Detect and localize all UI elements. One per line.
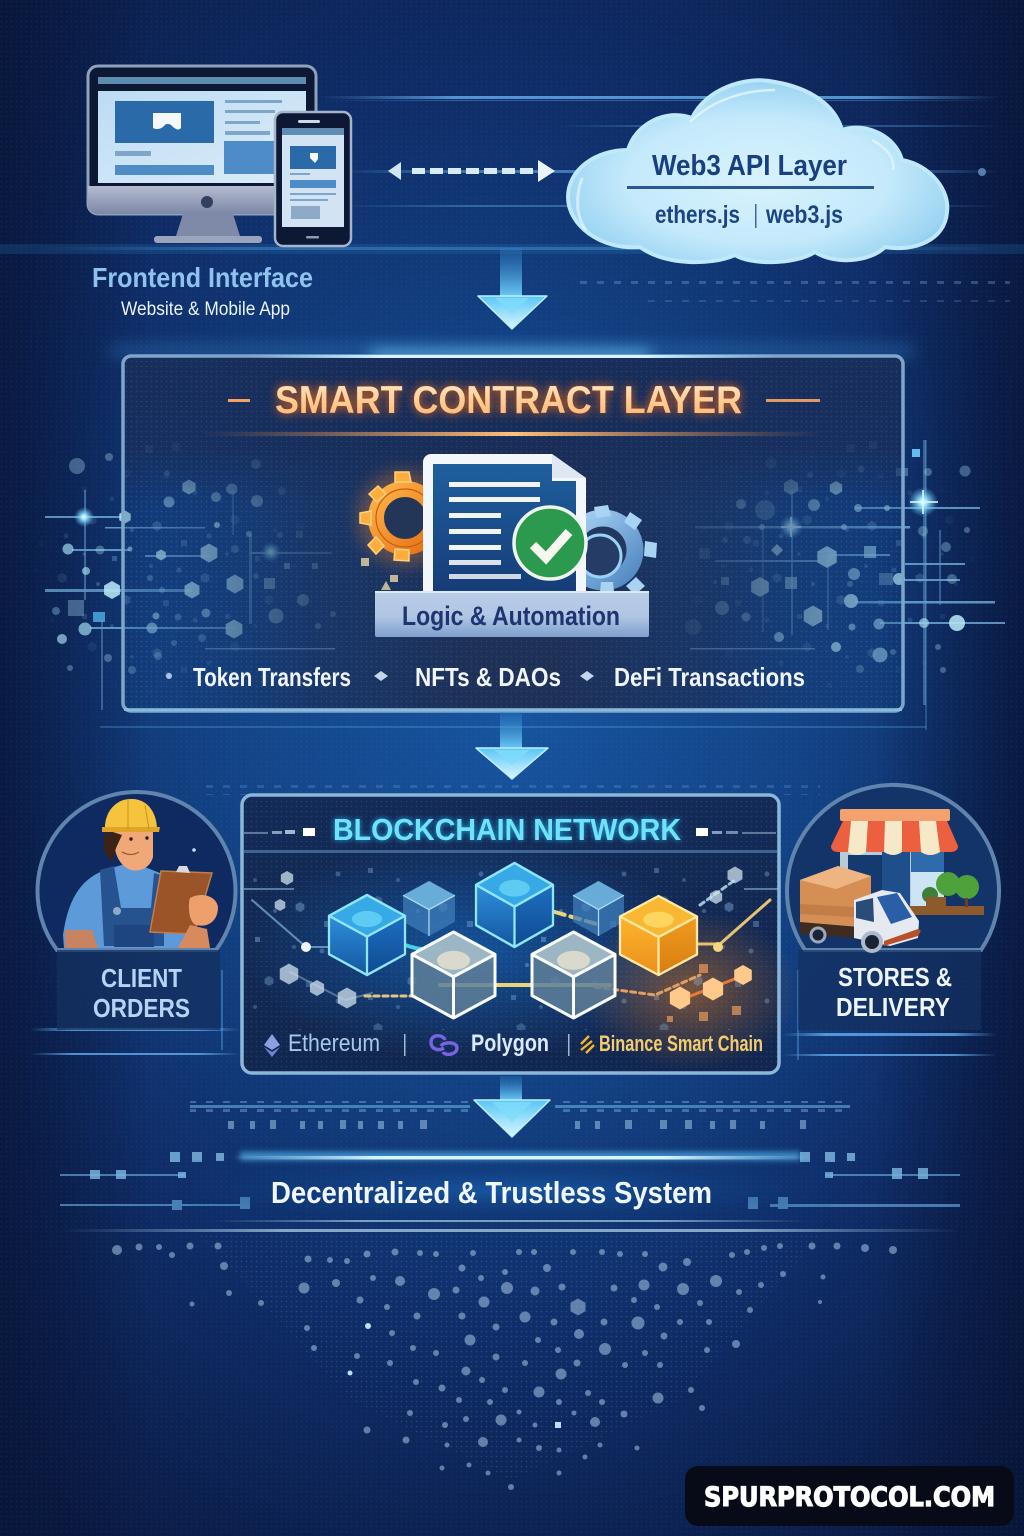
label: client orders: [93, 963, 190, 1023]
features row: Token Transfers: [193, 662, 351, 692]
sparkles: [74, 487, 938, 562]
cloud title: Web3 API Layer: [652, 150, 847, 182]
features row: NFTs & DAOs: [415, 662, 561, 692]
frontend subheading: Website & Mobile App: [121, 299, 290, 320]
panel title: SMART CONTRACT LAYER: [275, 379, 742, 422]
blockchain nodes: [275, 866, 752, 1022]
panel title: BLOCKCHAIN NETWORK: [333, 812, 682, 847]
features row: DeFi Transactions: [614, 662, 805, 692]
icon: blue gear: [565, 505, 657, 595]
arrow: blockchain to decentralized system: [474, 1076, 550, 1137]
chain labels: [264, 1030, 763, 1057]
illustration: store: [831, 809, 984, 915]
network links: [252, 880, 770, 1000]
right cluster lines: [695, 440, 1005, 705]
features row: [166, 662, 805, 692]
icon: contract document: [423, 454, 586, 592]
double-headed dashed arrow: [388, 160, 555, 182]
label: stores and delivery: [836, 962, 952, 1022]
logic and automation banner: [375, 591, 649, 637]
label: stores and delivery: STORES &: [838, 962, 952, 992]
illustration: worker: [63, 799, 218, 948]
left cluster particles: [52, 443, 303, 678]
panel: smart contract layer: [123, 355, 903, 711]
cloud: Web3 API layer: [568, 80, 947, 262]
icon: orange gear: [357, 470, 453, 590]
icon: check badge: [514, 507, 586, 579]
frontend heading: Frontend Interface: [92, 262, 313, 293]
banner: decentralized and trustless system: Decentralized & Trustless System: [271, 1175, 712, 1210]
label: stores and delivery: DELIVERY: [836, 992, 950, 1022]
cloud libraries: ethers.js: [655, 201, 740, 229]
chain labels: Binance Smart Chain: [599, 1031, 763, 1056]
right cluster particles: [685, 441, 970, 673]
watermark badge: [685, 1466, 1014, 1526]
particle field above footer banner: [60, 1101, 960, 1210]
panel: blockchain network: [240, 795, 800, 1073]
blocks: [329, 863, 697, 1018]
banner: decentralized and trustless system: [60, 1152, 960, 1232]
illustration: delivery truck: [800, 866, 921, 951]
chain labels: Ethereum: [288, 1030, 380, 1057]
arrow: cloud to smart contract: [478, 248, 547, 329]
label: client orders: CLIENT: [101, 963, 182, 993]
left cluster lines: [45, 490, 332, 710]
panel: stores and delivery: [787, 785, 999, 1030]
chain labels: Polygon: [471, 1030, 549, 1057]
phone icon: [275, 112, 351, 246]
arrow: smart contract to blockchain: [476, 712, 548, 779]
particle field below footer banner: [112, 1242, 897, 1490]
logic and automation banner: Logic & Automation: [402, 601, 620, 631]
cloud: Web3 API layer: web3.js: [765, 201, 843, 229]
label: client orders: ORDERS: [93, 993, 190, 1023]
panel: client orders: [38, 792, 236, 1030]
monitor icon: [88, 66, 316, 243]
watermark badge: SPURPROTOCOL.COM: [704, 1482, 995, 1513]
